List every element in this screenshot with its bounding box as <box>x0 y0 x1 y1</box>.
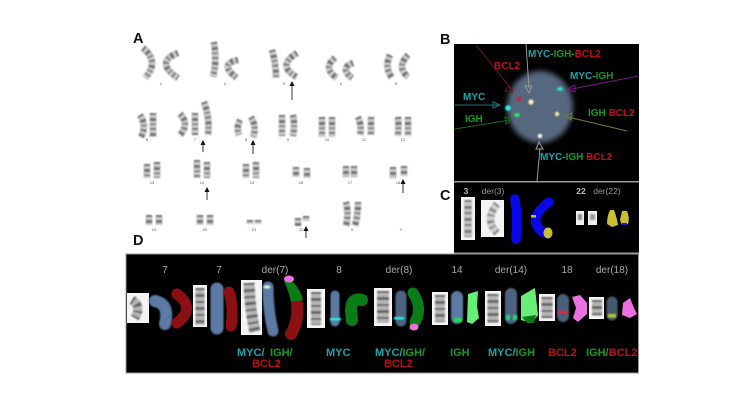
banded chromosome boxes <box>461 197 597 240</box>
panel B: interphase FISH nucleus <box>440 32 639 182</box>
chromosome number labels: 17 <box>348 180 353 185</box>
column headers: 8 <box>336 265 342 276</box>
column headers: 7 <box>162 265 168 276</box>
FISH probe labels: MYC-IGH <box>570 71 613 82</box>
chromosome number labels: 6 <box>146 137 149 142</box>
chromosome number labels: Y <box>400 227 403 232</box>
probe labels <box>237 347 637 370</box>
chromosome number labels: 13 <box>150 180 155 185</box>
chromosome number labels: 12 <box>401 137 406 142</box>
chromosome number labels: 1 <box>160 81 163 86</box>
column headers: der(22) <box>593 186 621 196</box>
column headers <box>464 186 621 196</box>
column headers: der(18) <box>596 265 628 276</box>
cell nucleus <box>507 71 573 143</box>
chromosome number labels <box>146 81 406 232</box>
FISH probe labels: MYC-IGH-BCL2 <box>528 49 601 60</box>
banded chromosome boxes <box>127 280 604 335</box>
heading: C: C <box>440 188 451 204</box>
probe labels: MYC/IGH <box>488 347 535 359</box>
chromosome number labels: 9 <box>287 137 290 142</box>
probe labels: IGH/ <box>270 347 293 359</box>
probe labels: MYC/IGH/ <box>375 347 425 359</box>
chromosome number labels: 10 <box>325 137 330 142</box>
probe labels: BCL2 <box>252 358 281 370</box>
column headers <box>162 265 628 276</box>
panel A: karyotype <box>133 31 408 238</box>
black background <box>454 44 639 182</box>
heading: A: A <box>133 31 144 47</box>
black background <box>454 182 639 252</box>
heading: D: D <box>133 233 143 249</box>
chromosome number labels: 4 <box>340 81 343 86</box>
FISH probe labels: IGH <box>465 114 483 125</box>
panel border <box>454 181 639 182</box>
chromosome number labels: 15 <box>250 180 255 185</box>
probe labels: IGH <box>450 347 470 359</box>
FISH probe labels <box>463 49 635 163</box>
chromosome number labels: X <box>351 227 354 232</box>
column headers: 14 <box>451 265 463 276</box>
FISH probe labels: IGH BCL2 <box>588 108 635 119</box>
column headers: 22 <box>576 186 586 196</box>
probe labels: IGH/BCL2 <box>586 347 637 359</box>
chromosome number labels: 19 <box>152 227 157 232</box>
DAPI blue chromosomes <box>155 287 612 331</box>
column headers: 3 <box>464 186 469 196</box>
chromosome number labels: 11 <box>362 137 367 142</box>
panel border <box>454 252 639 254</box>
chromosome number labels: 3 <box>283 81 286 86</box>
FISH signals on chromosomes <box>264 285 616 322</box>
chromosome number labels: 8 <box>245 137 248 142</box>
chromosome number labels: 18 <box>396 180 401 185</box>
column headers: 18 <box>561 265 573 276</box>
column headers: der(7) <box>262 265 288 276</box>
FISH probe labels: BCL2 <box>494 61 521 72</box>
signal spots <box>505 87 563 138</box>
chromosome number labels: 5 <box>395 81 398 86</box>
black background <box>126 254 638 373</box>
painted blue chromosomes <box>515 199 552 239</box>
chromosome number labels: 7 <box>194 137 197 142</box>
chromosome number labels: 2 <box>224 81 227 86</box>
painted yellow chromosomes <box>607 210 629 227</box>
probe labels: BCL2 <box>548 347 577 359</box>
chromosome number labels: 14 <box>200 180 205 185</box>
painted chromosomes <box>177 276 637 334</box>
probe labels: MYC <box>326 347 350 359</box>
panel D: spectral karyotype rows <box>126 233 638 373</box>
panel C: chromosome 3 and 22 translocation <box>440 182 639 254</box>
column headers: der(14) <box>495 265 527 276</box>
FISH probe labels: MYC-IGH BCL2 <box>540 152 613 163</box>
chromosome number labels: 22 <box>299 227 304 232</box>
chromosome number labels: 20 <box>203 227 208 232</box>
chromosome number labels: 16 <box>299 180 304 185</box>
FISH probe labels: MYC <box>463 92 485 103</box>
probe labels: BCL2 <box>384 358 413 370</box>
probe labels: MYC/ <box>237 347 264 359</box>
chromosomes row 1 to 4 <box>140 42 408 226</box>
column headers: 7 <box>216 265 222 276</box>
column headers: der(8) <box>386 265 412 276</box>
column headers: der(3) <box>482 186 504 196</box>
heading: B: B <box>440 32 450 48</box>
pointer arrows <box>455 44 638 181</box>
chromosome number labels: 21 <box>252 227 257 232</box>
arrows marking abnormal chromosomes <box>200 81 406 238</box>
